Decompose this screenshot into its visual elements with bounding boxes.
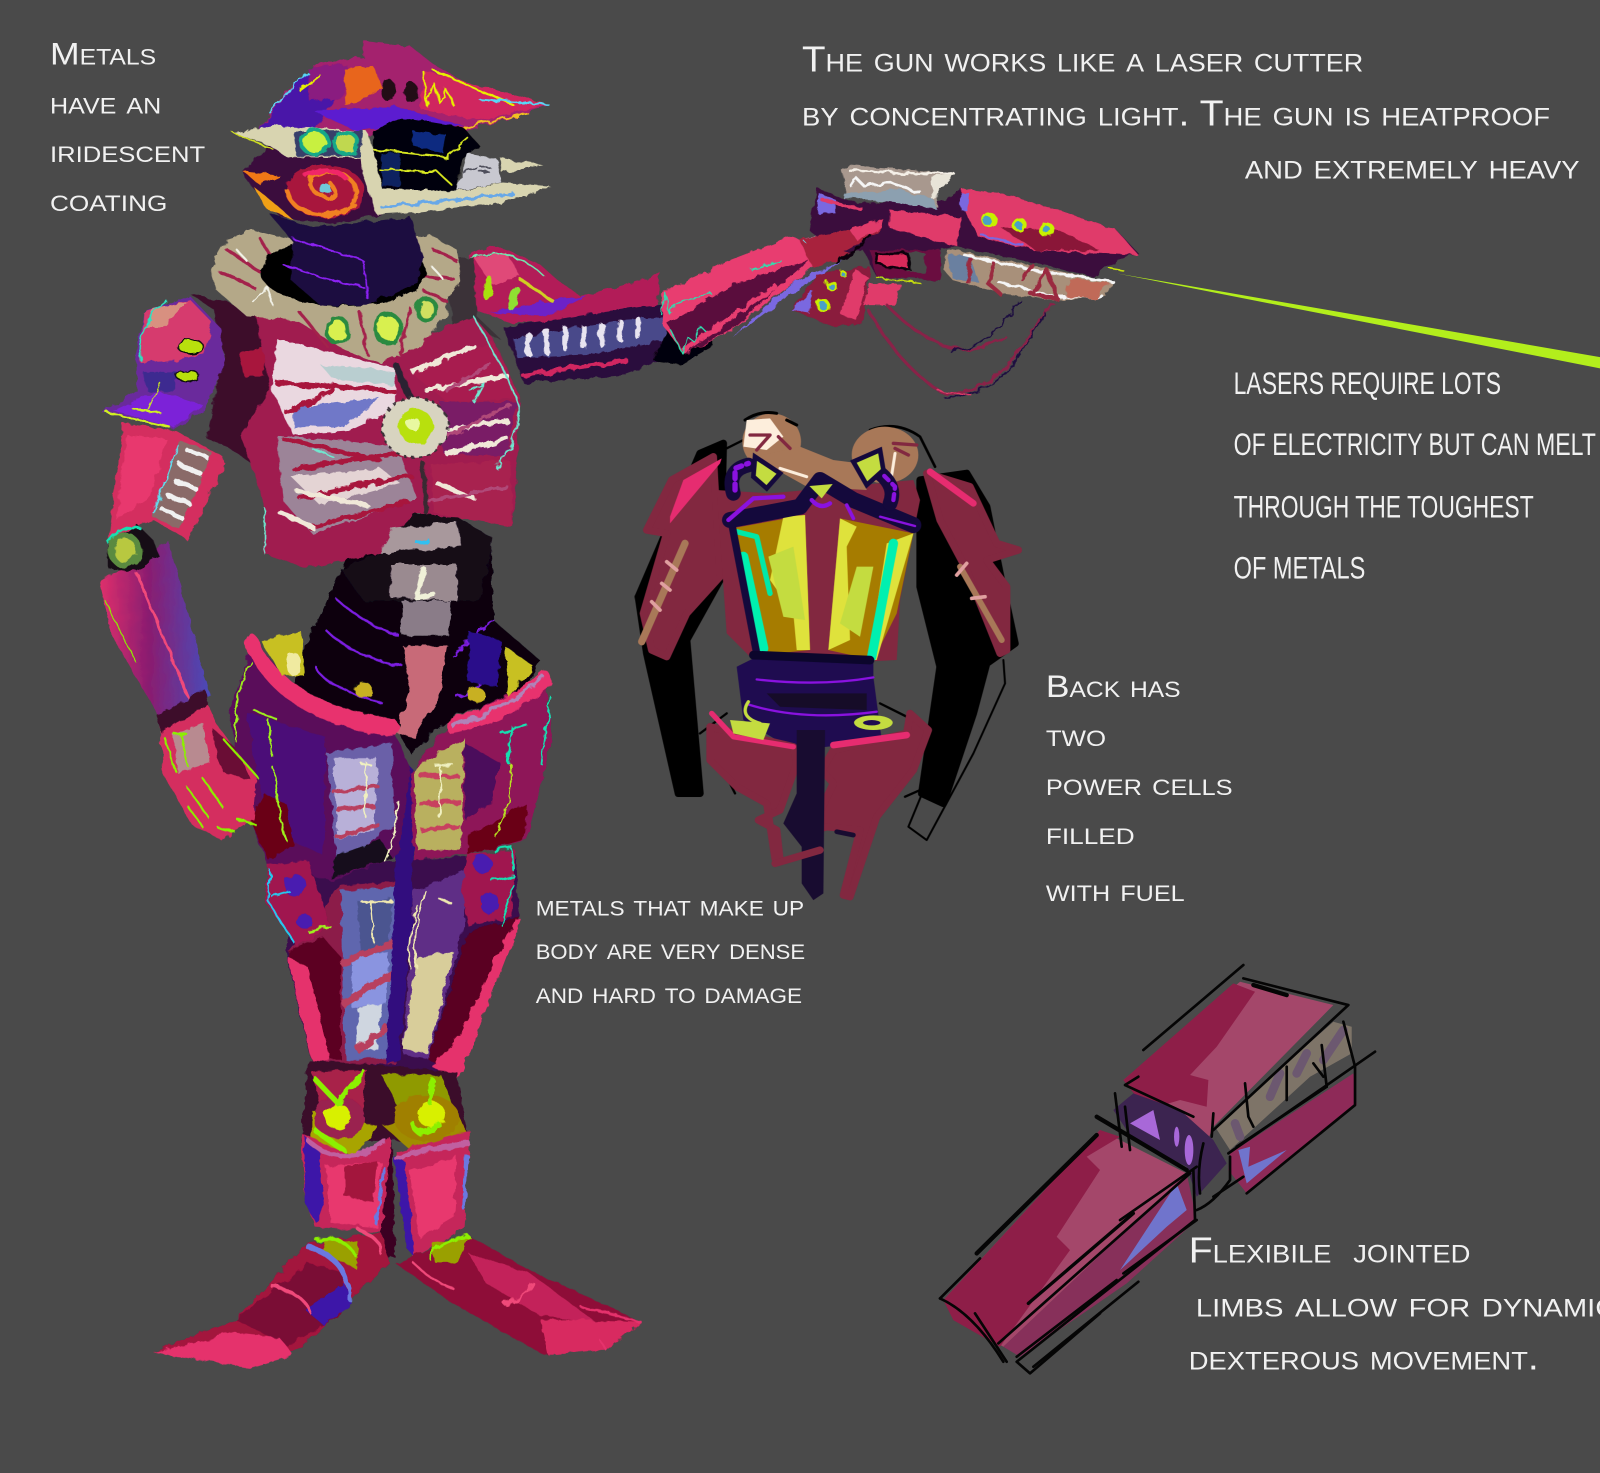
text: gun description bbox=[802, 39, 1580, 187]
text: flexible limbs note: Flexibile jointed bbox=[1189, 1230, 1470, 1270]
ribbed arm bbox=[503, 302, 700, 383]
helmet gadget bbox=[457, 153, 502, 190]
text: iridescent coating note bbox=[50, 35, 205, 218]
back: maroon armour bbox=[643, 457, 1018, 667]
visor window bbox=[373, 117, 480, 190]
left upper arm bbox=[108, 424, 223, 539]
text: iridescent coating note: iridescent bbox=[50, 133, 205, 169]
forearm bbox=[661, 236, 816, 354]
collar bbox=[210, 230, 462, 363]
back: power cell right bbox=[828, 518, 913, 660]
figure: lower body bbox=[99, 541, 641, 1368]
collar lights bbox=[325, 297, 438, 346]
text: power cells note: filled bbox=[1046, 815, 1135, 851]
gun body bbox=[809, 188, 1138, 280]
back: black arms bbox=[638, 426, 1015, 840]
gun grip bbox=[791, 267, 870, 327]
feet bbox=[154, 1233, 390, 1365]
figure: upper body bbox=[102, 41, 713, 601]
back view sketch bbox=[638, 413, 1018, 900]
helmet crest bbox=[257, 41, 548, 137]
gun cables bbox=[868, 300, 1052, 397]
text: gun description: and extremely heavy bbox=[1245, 147, 1580, 187]
knee guards bbox=[265, 860, 330, 947]
text: power cells note: Back has bbox=[1046, 668, 1181, 704]
text: dense metals note: and hard to damage bbox=[536, 977, 802, 1010]
gun barrel bbox=[944, 248, 1113, 300]
limb: upper block bbox=[1123, 982, 1357, 1193]
text: iridescent coating note: coating bbox=[50, 182, 167, 218]
elbow bbox=[108, 524, 160, 572]
text: dense metals note: metals that make up bbox=[536, 889, 804, 922]
back: power cell left bbox=[732, 515, 810, 655]
thigh right bbox=[410, 677, 552, 860]
text: gun description: The gun works like a laser cutter bbox=[802, 39, 1363, 79]
dark shoulder joint bbox=[190, 294, 293, 465]
hanging forearm and hand bbox=[99, 541, 209, 717]
back: waist bbox=[737, 655, 882, 750]
back: tan limbs and head bbox=[642, 413, 1002, 642]
figure: raised forearm and gun bbox=[661, 165, 1138, 397]
back: spine bbox=[783, 730, 825, 900]
left leg bbox=[288, 881, 399, 1064]
text: laser note: LASERS REQUIRE LOTS bbox=[1234, 365, 1501, 401]
text: iridescent coating note: Metals bbox=[50, 35, 156, 71]
text: power cells note: with fuel bbox=[1046, 872, 1185, 908]
text: power cells note bbox=[1046, 668, 1233, 908]
text: laser note: OF METALS bbox=[1234, 550, 1365, 586]
helmet face bbox=[243, 146, 382, 224]
laser beam bbox=[1117, 273, 1600, 368]
back: hips bbox=[710, 702, 928, 897]
text: power cells note: power cells bbox=[1046, 766, 1233, 802]
limb: joint bbox=[1113, 1093, 1227, 1197]
abdomen plates bbox=[340, 515, 493, 601]
eyes bbox=[300, 128, 360, 156]
thigh left bbox=[228, 641, 410, 881]
text: dense metals note bbox=[536, 889, 805, 1010]
right leg bbox=[403, 870, 465, 1059]
text: flexible limbs note: dexterous movement. bbox=[1189, 1337, 1539, 1377]
gun trigger bbox=[870, 250, 941, 280]
spiral bbox=[286, 164, 364, 218]
boots bbox=[301, 1133, 392, 1233]
gun dials bbox=[981, 212, 1055, 238]
neck bbox=[261, 238, 426, 306]
waist bbox=[294, 544, 541, 753]
back: purple straps bbox=[728, 450, 915, 526]
chest medallion bbox=[382, 397, 448, 458]
limb: lower block bbox=[943, 1130, 1197, 1357]
shoulder shadow bbox=[443, 257, 500, 339]
torso bbox=[240, 302, 520, 568]
text: laser note bbox=[1234, 365, 1596, 586]
text: dense metals note: body are very dense bbox=[536, 933, 805, 966]
robot figure bbox=[99, 41, 1138, 1368]
text: power cells note: two bbox=[1046, 717, 1106, 753]
text: flexible limbs note: limbs allow for dynamic bbox=[1196, 1284, 1600, 1324]
knees bbox=[301, 1059, 468, 1141]
gun scope bbox=[841, 165, 954, 207]
limb: ink lines bbox=[940, 965, 1375, 1373]
text: iridescent coating note: have an bbox=[50, 84, 161, 120]
leg backing bbox=[286, 855, 519, 1075]
text: flexible limbs note bbox=[1189, 1230, 1600, 1377]
text: gun description: by concentrating light. The gun is heatproof bbox=[802, 94, 1550, 134]
jointed limb sketch bbox=[940, 965, 1375, 1373]
visor frame bbox=[233, 126, 551, 214]
left shoulder pad bbox=[102, 296, 223, 429]
right upper arm bbox=[467, 246, 660, 324]
